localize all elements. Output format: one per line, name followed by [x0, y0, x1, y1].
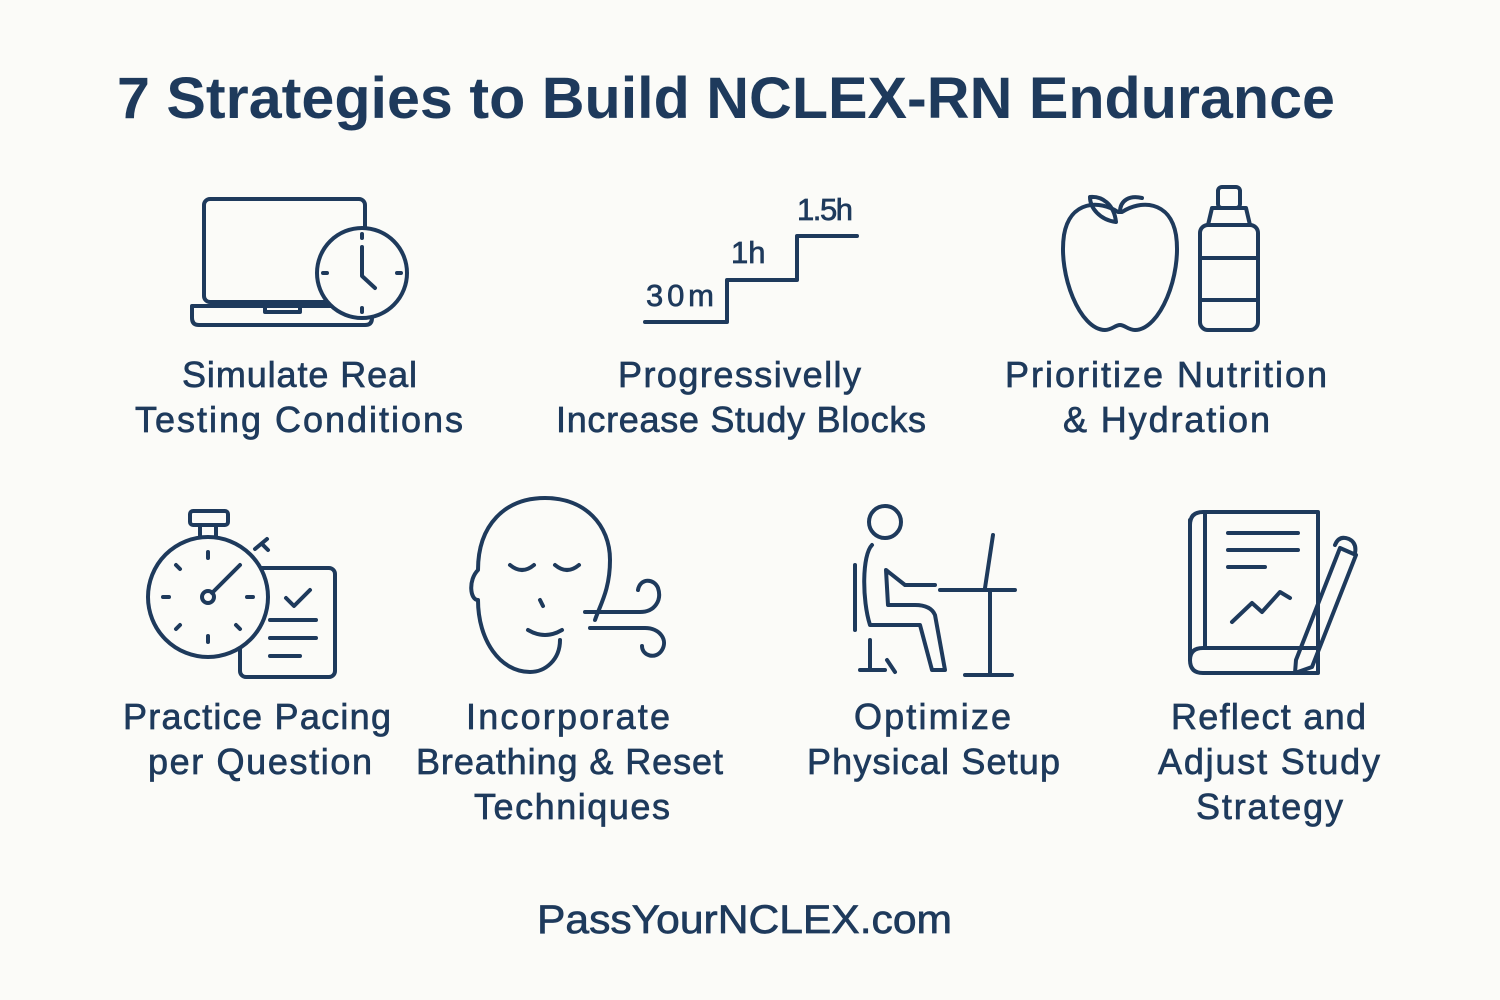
icon: person at desk: [855, 506, 1015, 675]
stair labels: 1h: [731, 235, 765, 270]
label: reflect: Reflect and: [1171, 696, 1366, 737]
label: nutrition: & Hydration: [1063, 399, 1270, 440]
icon: stopwatch with checklist: [148, 511, 335, 677]
stair labels: 30m: [646, 278, 714, 313]
label: nutrition: Prioritize Nutrition: [1005, 354, 1327, 395]
label: simulate: Simulate Real: [182, 354, 417, 395]
label: reflect: Adjust Study: [1158, 741, 1380, 782]
label: pacing: Practice Pacing: [123, 696, 391, 737]
label: pacing: per Question: [148, 741, 372, 782]
label: physical setup: Physical Setup: [807, 741, 1060, 782]
label: progressively: Increase Study Blocks: [556, 399, 926, 440]
stair labels: [646, 192, 853, 313]
label: breathing: Techniques: [474, 786, 670, 827]
label: progressively: Progressivelly: [618, 354, 861, 395]
icon: face breathing: [471, 498, 664, 672]
icon: apple and bottle: [1063, 187, 1258, 330]
label: breathing: Incorporate: [466, 696, 670, 737]
stair labels: 1.5h: [797, 192, 853, 227]
title: 7 Strategies to Build NCLEX-RN Endurance: [117, 66, 1335, 131]
icon: stairs: [645, 236, 857, 322]
label: physical setup: Optimize: [854, 696, 1011, 737]
label: reflect: Strategy: [1196, 786, 1343, 827]
footer: PassYourNCLEX.com: [537, 898, 952, 942]
icon: laptop with clock: [192, 199, 407, 325]
icon: notebook with pencil: [1190, 512, 1356, 673]
label: simulate: Testing Conditions: [135, 399, 463, 440]
label: breathing: Breathing & Reset: [416, 741, 723, 782]
